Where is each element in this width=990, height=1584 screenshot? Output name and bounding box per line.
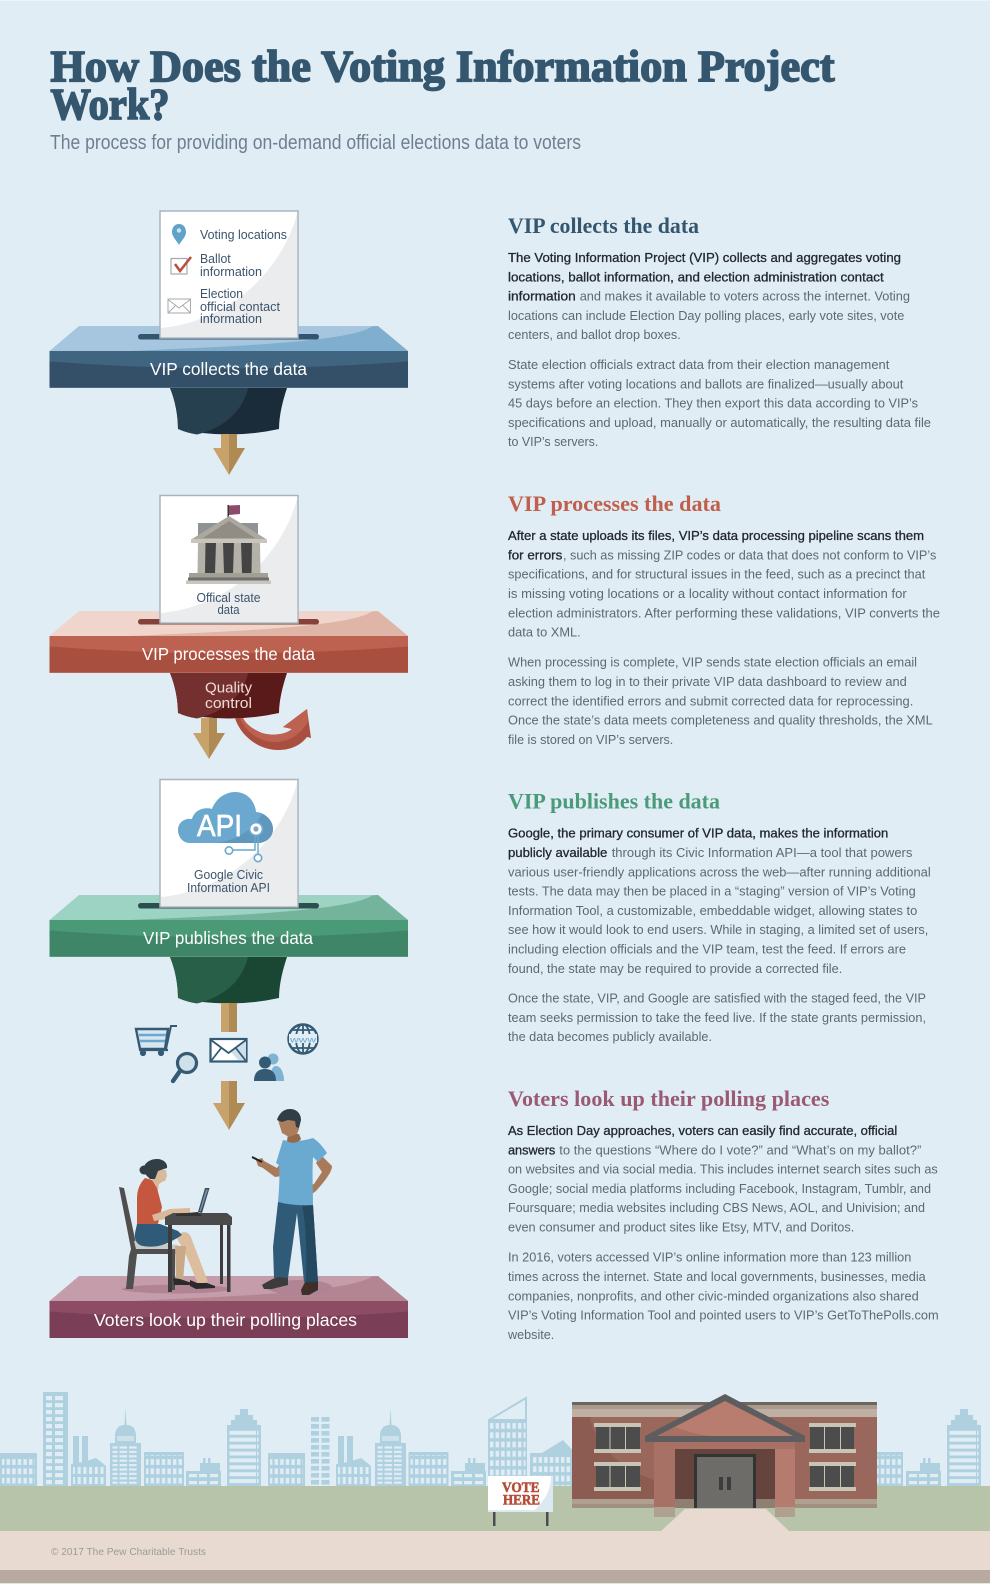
paragraph 1: Foursquare; media websites including CBS News, AOL, and Univision; and (508, 1200, 925, 1215)
funnel neck (170, 957, 287, 1004)
paragraph 1: answers (508, 1142, 556, 1157)
vote here sign: HERE (503, 1492, 540, 1508)
ground and road (0, 1486, 990, 1584)
paragraph 2 (508, 357, 931, 449)
paragraph 1: locations, ballot information, and election administration contact (508, 269, 884, 284)
paragraph 1: various user-friendly applications across the web—after running additional (508, 864, 931, 879)
school polling place (572, 1394, 877, 1517)
text: google civic information api: Information API (187, 881, 270, 895)
portico and door (654, 1442, 795, 1517)
text section: VIP publishes the data (508, 788, 931, 1044)
paragraph 2 (508, 655, 933, 747)
paragraph 2 (508, 991, 926, 1044)
funnel neck (170, 673, 287, 718)
paragraph 1: including election officials and the VIP team, test the feed. If errors are (508, 942, 906, 956)
paragraph 1: on websites and via social media. This includes internet search sites such as (508, 1162, 938, 1177)
panel: step 1 funnel (50, 211, 408, 475)
paragraph 1 (508, 528, 940, 640)
paragraph 2: State election officials extract data from their election management (508, 357, 890, 372)
paragraph 1: centers, and ballot drop boxes. (508, 327, 681, 342)
paragraph 2: asking them to log in to their private VIP data dashboard to review and (508, 674, 907, 689)
paragraph 1: election administrators. After performing these validations, VIP converts the (508, 605, 940, 620)
panel: voters platform (50, 1109, 408, 1338)
text: official state data: Offical state (196, 591, 261, 605)
text: google civic information api: Google Civic (194, 868, 263, 882)
icon: state building (186, 505, 271, 584)
paragraph 2: times across the internet. State and local governments, businesses, media (508, 1269, 926, 1284)
text: google civic information api (187, 868, 270, 895)
icon: envelope (210, 1039, 246, 1062)
subtitle: The process for providing on-demand official elections data to voters (50, 132, 581, 154)
paragraph 2: correct the identified errors and submit corrected data for reprocessing. (508, 693, 913, 708)
figure: table and laptop (165, 1188, 232, 1292)
paragraph 1: information (508, 289, 576, 304)
icon: API cloud: API (197, 808, 242, 843)
platform top (50, 1276, 408, 1301)
paragraph 1 (508, 250, 910, 342)
paragraph 2: VIP’s Voting Information Tool and pointed users to VIP’s GetToThePolls.com (508, 1308, 939, 1323)
text section: VIP processes the data (508, 491, 940, 747)
paragraph 2: team seeks permission to take the feed live. If the state grants permission, (508, 1010, 926, 1025)
text: quality control (205, 680, 253, 712)
icon: map pin (172, 224, 186, 245)
figure: seated woman (119, 1159, 215, 1290)
text section: VIP collects the data (508, 213, 931, 449)
icon: checkbox (171, 257, 191, 274)
paragraph 1 (508, 1123, 938, 1234)
text: voting locations: Voting locations (200, 228, 287, 242)
panel: step 2 funnel (50, 496, 408, 759)
paragraph 2: specifications and upload, manually or automatically, the resulting data file (508, 415, 931, 430)
paragraph 1: found, the state may be required to provide a corrected file. (508, 961, 842, 976)
paragraph 2 (507, 1250, 939, 1342)
paragraph 1: for errors (508, 547, 563, 562)
icon: www globe (288, 1024, 318, 1054)
text section: Voters look up their polling places (507, 1086, 939, 1342)
arrow: down (193, 718, 225, 759)
text: election official contact information: official contact (200, 300, 281, 314)
paragraph 1: and makes it available to voters across the internet. Voting (580, 289, 910, 304)
paragraph 1: locations can include Election Day polling places, early vote sites, vote (508, 308, 904, 323)
text: official state data: data (218, 603, 240, 617)
paragraph 2: In 2016, voters accessed VIP’s online information more than 123 million (508, 1250, 911, 1265)
funnel box front (50, 351, 408, 388)
paragraph 2: website. (507, 1327, 554, 1342)
figure: standing man (252, 1109, 332, 1295)
paragraph 1 (508, 826, 931, 976)
copyright: © 2017 The Pew Charitable Trusts (51, 1546, 206, 1558)
icon: people (254, 1054, 284, 1081)
windows (594, 1423, 856, 1491)
arrow (213, 1081, 245, 1130)
platform front (50, 1301, 408, 1338)
paragraph 1: is missing voting locations or a locality without contact information for (508, 586, 907, 601)
paragraph 1: Google; social media platforms including Facebook, Instagram, Tumblr, and (508, 1181, 931, 1196)
paragraph 2: the data becomes publicly available. (508, 1029, 712, 1044)
paragraph 1: specifications, and for structural issues in the feed, such as a precinct that (508, 567, 926, 582)
icon: shopping cart (136, 1026, 177, 1056)
heading: VIP publishes the data (508, 788, 720, 813)
paragraph 2: companies, nonprofits, and other civic-minded organizations also shared (508, 1288, 919, 1303)
funnel box top (50, 611, 408, 636)
text: quality control: Quality (205, 680, 253, 697)
paragraph 1: As Election Day approaches, voters can easily find accurate, official (508, 1123, 897, 1138)
paragraph 1: to the questions “Where do I vote?” and “What’s on my ballot?” (559, 1142, 921, 1157)
panel: step 3 funnel (50, 780, 408, 1032)
city skyline (0, 1392, 981, 1486)
text: election official contact information (200, 287, 281, 326)
pediment roof (645, 1394, 805, 1442)
paragraph 1: Information Tool, a customizable, embeddable widget, allowing states to (508, 903, 917, 918)
icon: www globe: www (289, 1036, 316, 1044)
text: official state data (196, 591, 261, 617)
shadows (122, 1280, 332, 1295)
funnel label: VIP collects the data (150, 359, 307, 379)
vote here sign (488, 1476, 553, 1526)
funnel box top (50, 895, 408, 920)
text: ballot information: information (200, 265, 262, 279)
funnel box front (50, 636, 408, 673)
paragraph 1: tests. The data may then be placed in a “staging” version of VIP’s Voting (508, 884, 916, 899)
paragraph 2: When processing is complete, VIP sends state election officials an email (508, 655, 917, 670)
text: election official contact information: Election (200, 287, 243, 301)
ballot card (160, 211, 298, 338)
paragraph 1: even consumer and product sites like Etsy, MTV, and Doritos. (508, 1220, 854, 1234)
heading: VIP processes the data (508, 491, 721, 516)
text: ballot information (200, 252, 262, 279)
paragraph 1: through its Civic Information API—a tool that powers (612, 845, 913, 860)
title: Work? (50, 80, 170, 129)
heading: Voters look up their polling places (508, 1086, 830, 1111)
paragraph 2: Once the state, VIP, and Google are satisfied with the staged feed, the VIP (508, 991, 926, 1006)
heading: VIP collects the data (508, 213, 699, 238)
paragraph 1: Google, the primary consumer of VIP data, makes the information (508, 826, 888, 841)
paragraph 2: systems after voting locations and ballots are finalized—usually about (508, 376, 904, 391)
title: How Does the Voting Information Project (50, 42, 835, 91)
paragraph 2: to VIP’s servers. (508, 434, 598, 449)
funnel neck (170, 388, 287, 434)
paragraph 1: , such as missing ZIP codes or data that does not conform to VIP’s (563, 547, 937, 562)
vote here sign: VOTE (502, 1480, 540, 1496)
funnel box top (50, 326, 408, 351)
text: ballot information: Ballot (200, 252, 231, 266)
panel: channel icons (136, 1024, 318, 1130)
icon: magnifier (173, 1054, 196, 1081)
paragraph 2: 45 days before an election. They then export this data according to VIP’s (508, 396, 918, 411)
arrow: rejection loop (235, 709, 311, 750)
paragraph 1: The Voting Information Project (VIP) collects and aggregates voting (508, 250, 901, 265)
paragraph 1: publicly available (508, 845, 607, 860)
arrow: connector (221, 1003, 237, 1032)
platform label: Voters look up their polling places (94, 1310, 357, 1330)
title (50, 42, 835, 129)
ballot card (160, 780, 298, 907)
text: quality control: control (205, 695, 252, 712)
funnel label: VIP processes the data (142, 644, 315, 664)
ballot card (160, 496, 298, 623)
paragraph 2: file is stored on VIP’s servers. (508, 732, 673, 747)
funnel box front (50, 920, 408, 957)
paragraph 1: After a state uploads its files, VIP’s data processing pipeline scans them (508, 528, 924, 543)
paragraph 1: see how it would look to end users. While in staging, a limited set of users, (508, 922, 928, 937)
funnel label: VIP publishes the data (143, 928, 313, 948)
paragraph 1: data to XML. (508, 625, 581, 640)
paragraph 2: Once the state’s data meets completeness and quality thresholds, the XML (508, 713, 933, 728)
arrow (213, 434, 245, 475)
text: election official contact information: information (200, 312, 262, 326)
icon: envelope (168, 299, 190, 313)
